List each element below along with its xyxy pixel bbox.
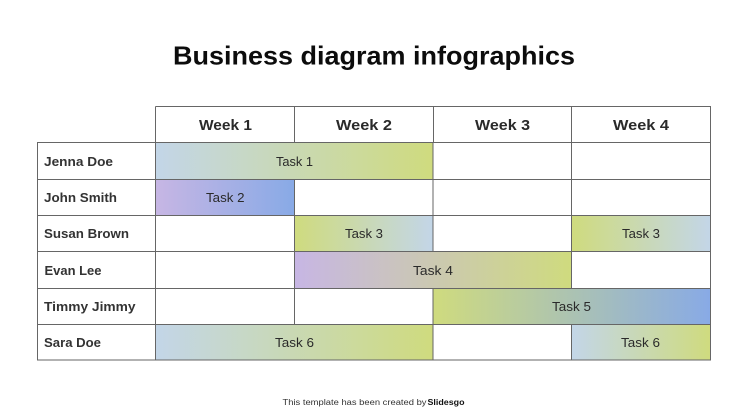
task labels: Task 6 — [275, 335, 314, 350]
footer credit — [282, 398, 465, 407]
task labels: Task 4 — [413, 263, 453, 278]
task bar: Task 5 — [433, 288, 711, 324]
task bar: Task 3 second — [572, 216, 711, 252]
task bar: Task 4 — [294, 252, 572, 288]
task labels: Task 5 — [552, 299, 591, 314]
title: Business diagram infographics — [173, 40, 575, 70]
column headers: Week 1 — [199, 117, 252, 134]
task bar: Task 1 — [156, 143, 433, 179]
row names: Timmy Jimmy — [44, 299, 136, 314]
footer credit: This template has been created by — [282, 398, 426, 407]
row names: Evan Lee — [44, 263, 102, 278]
task labels: Task 3 — [622, 226, 660, 241]
row names: John Smith — [44, 190, 117, 205]
task bar: Task 6 first — [156, 324, 433, 360]
row names: Susan Brown — [44, 226, 129, 241]
footer credit: Slidesgo — [428, 398, 465, 407]
column headers: Week 2 — [336, 117, 392, 134]
task bar: Task 3 first — [294, 216, 433, 252]
column headers — [199, 117, 670, 134]
task labels: Task 1 — [276, 154, 313, 169]
column headers: Week 3 — [475, 117, 530, 134]
row names — [44, 154, 136, 350]
task bar: Task 2 — [156, 179, 294, 216]
task labels: Task 2 — [206, 190, 244, 205]
row names: Sara Doe — [44, 335, 101, 350]
task bar: Task 6 second — [572, 324, 711, 360]
task labels — [206, 154, 660, 350]
column headers: Week 4 — [613, 117, 670, 134]
row names: Jenna Doe — [44, 154, 113, 169]
task labels: Task 3 — [345, 226, 383, 241]
gantt table — [38, 106, 711, 360]
task labels: Task 6 — [621, 335, 660, 350]
